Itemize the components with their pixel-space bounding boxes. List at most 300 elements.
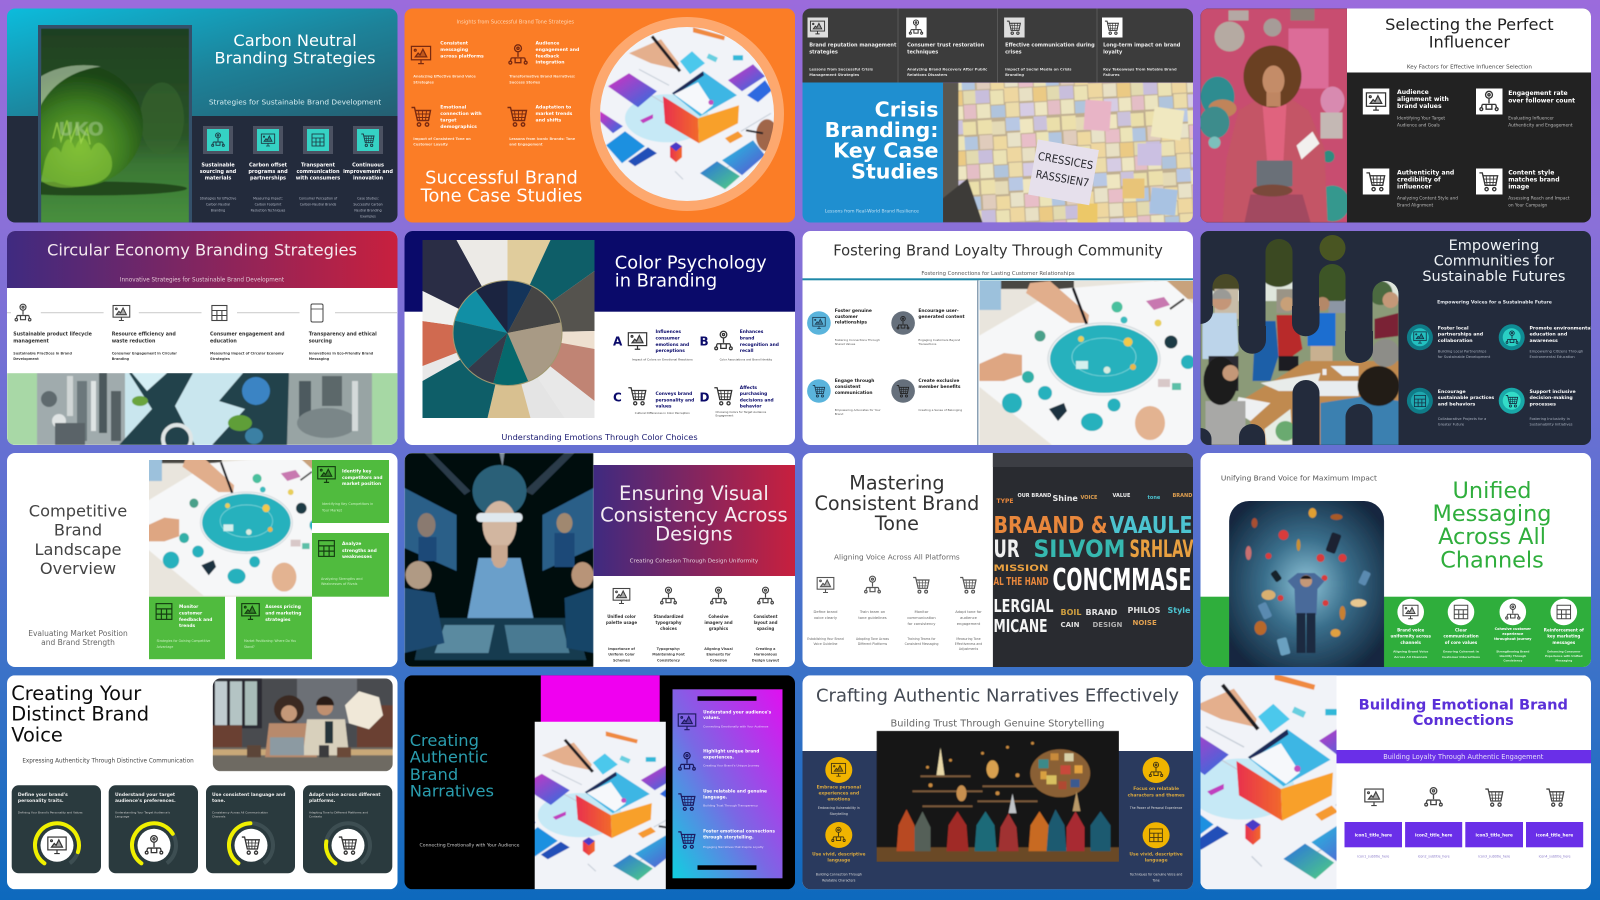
item: environmental education: Environmental Education <box>1530 355 1575 359</box>
step: storytelling: Foster emotional connections <box>703 829 775 835</box>
column: carbon offset: Carbon offset <box>249 162 288 168</box>
title <box>1359 696 1568 729</box>
card: audience preferences: Understanding Your Target Audience's <box>115 810 170 814</box>
image: futuristic visor scene <box>404 453 594 667</box>
image: community meeting seen through rounded columns <box>1200 230 1400 445</box>
item: user content: generated content <box>918 314 965 320</box>
block: pricing and marketing: strategies <box>265 617 291 623</box>
column: imagery: Cohesive <box>708 614 729 619</box>
card: personality traits <box>12 785 101 876</box>
channel: brand voice: Across All Channels <box>1394 655 1427 659</box>
column: trust: Consumer trust restoration <box>907 42 985 48</box>
step: genuine language: Building Trust Through Transparency <box>703 804 758 808</box>
subtitle: Key Factors for Effective Influencer Selection <box>1407 64 1532 70</box>
item: audience engagement <box>509 40 579 84</box>
block: analyze strengths <box>312 533 389 597</box>
column: icon 1 <box>1344 789 1402 858</box>
column: adopt tone: Measuring Tone <box>956 637 981 641</box>
item: user content: Encourage user- <box>918 308 959 314</box>
factor: content style: Content style <box>1508 170 1554 176</box>
subtitle: Building Trust Through Genuine Storytelling <box>891 719 1104 730</box>
column: icon 1: icon1_subtitle_here <box>1357 854 1389 858</box>
image: community planning map <box>974 279 1199 449</box>
panel: Selecting the Perfect Influencer: Influencer <box>1429 32 1510 52</box>
title <box>410 731 494 801</box>
item: audience engagement: Audience <box>536 40 559 46</box>
channel: core values: Ensuring Coherent in <box>1443 650 1479 654</box>
item D: behavior <box>740 404 762 410</box>
step: audience values: values. <box>703 715 721 721</box>
column: layout: spacing <box>757 626 774 631</box>
column: colour palette <box>606 588 637 663</box>
channel: customer experience <box>1494 599 1532 662</box>
step: storytelling: through storytelling. <box>703 835 754 841</box>
image: colour wheel <box>422 240 594 418</box>
title: Creating <box>410 731 479 750</box>
column: define voice: Establishing Your Brand <box>807 637 844 641</box>
item B: recognition and <box>740 342 779 348</box>
footer subtitle: Understanding Emotions Through Color Choices <box>501 432 698 442</box>
column: reputation: Management Strategies <box>809 73 860 77</box>
factor: audience alignment: brand values <box>1397 103 1442 110</box>
card: personality traits: Defining Your Brand's Personality and Values <box>18 810 83 814</box>
factor: engagement rate: over follower count <box>1508 98 1575 104</box>
column: continuous improvement: Continuous <box>352 162 384 168</box>
column: define voice: Voice Guideline <box>814 642 838 646</box>
item: personal experiences: Storytelling <box>830 812 848 816</box>
image: typography wall: PHILOS <box>1128 606 1161 615</box>
column: transparent communication: Carbon-Neutral Brands <box>300 202 337 206</box>
item: local partnerships <box>1407 324 1491 359</box>
title block: Crisis <box>875 98 938 122</box>
item D: Engagement <box>716 414 734 418</box>
step: storytelling: Engaging Narratives that Inspire Loyalty <box>703 845 764 849</box>
column: sustainable sourcing: Sustainable <box>201 162 235 168</box>
card: adapt voice: Contexts <box>309 814 322 818</box>
item: environmental education: awareness <box>1530 338 1558 344</box>
column: communication: Effective communication during <box>1005 42 1095 48</box>
column: train team: tone guidelines <box>858 616 887 620</box>
title: Brand <box>410 765 458 784</box>
column: communication <box>1004 18 1095 77</box>
block: identify competitors: market position <box>342 481 381 487</box>
column: transparent communication: communication <box>296 169 340 175</box>
column: reputation: Lessons from Successful Crisis <box>809 68 874 72</box>
block: analyze strengths: strengths and <box>342 548 377 554</box>
item: vivid language right: Use vivid, descriptive <box>1129 851 1183 857</box>
column: carbon offset: Carbon Footprint <box>255 202 282 206</box>
item: local partnerships: collaboration <box>1438 338 1473 344</box>
factor: content style: on Your Campaign <box>1508 202 1548 208</box>
column: adopt tone: Adjustments <box>959 647 979 651</box>
panel: Circular Economy Branding Strategies <box>7 231 398 453</box>
item A <box>613 329 693 362</box>
column: monitor: Consistent Messaging <box>905 642 938 646</box>
step: transparency <box>309 304 377 361</box>
item D: decisions and <box>740 398 774 404</box>
item: consistent communication: consistent <box>835 384 860 390</box>
title: Competitive <box>29 502 127 521</box>
title: Empowering <box>1449 238 1539 254</box>
title: Creating Your <box>11 682 141 705</box>
image: green glass sphere <box>38 25 192 222</box>
column: typography: Standardized <box>653 614 684 619</box>
item: consistent communication: communication <box>835 390 873 396</box>
factor: engagement rate: Evaluating Influencer <box>1508 116 1554 122</box>
block: identify competitors <box>312 460 389 523</box>
item: adaptation to trends: Adaptation to <box>536 104 571 110</box>
channel: key messages: messages <box>1552 640 1576 645</box>
image: typography wall: BRAND <box>1172 493 1192 499</box>
channel: core values: communication <box>1443 634 1479 639</box>
column: imagery: graphics <box>709 626 729 631</box>
step: brand experiences: Highlight unique brand <box>703 749 759 755</box>
item: environmental education: Promote environmental <box>1530 326 1592 332</box>
item: vivid language left: Building Connection Through <box>816 873 862 877</box>
step: consumer engagement: Strategies <box>210 357 230 361</box>
item: vivid language right <box>1129 822 1183 883</box>
factor: content style: matches brand <box>1508 176 1560 184</box>
item: adaptation to trends: and shifts <box>536 118 562 124</box>
title: Across All <box>1438 524 1546 550</box>
card: consistent language: tone. <box>212 798 225 804</box>
step: product lifecycle: Development <box>13 357 39 361</box>
channel: core values <box>1442 599 1480 659</box>
block: monitor feedback: Advantage <box>157 645 173 649</box>
item: user content: Engaging Customers Beyond <box>918 338 960 342</box>
image: typography wall: BRAND <box>1086 608 1118 617</box>
channel: key messages: Experience with Unified <box>1545 654 1583 658</box>
column: carbon offset: programs and <box>248 169 288 175</box>
column: define voice <box>807 578 844 646</box>
channel: brand voice: Brand voice <box>1397 628 1425 633</box>
item: user content: Transactions <box>917 342 937 346</box>
block: analyze strengths: weaknesses <box>342 554 372 560</box>
column: sustainable sourcing: sourcing and <box>200 169 237 175</box>
image: typography wall: MICANE <box>994 616 1048 637</box>
title block <box>802 82 943 222</box>
step: transparency: sourcing <box>309 339 333 345</box>
image: planning map <box>140 455 324 599</box>
column: icon 4: icon4_subtitle_here <box>1539 854 1571 858</box>
title: Messaging <box>1433 501 1551 527</box>
column: sustainable sourcing: materials <box>205 176 231 182</box>
item: audience engagement: Success Stories <box>509 80 540 84</box>
item C: Cultural Differences in Color Perception <box>635 411 690 415</box>
item: adaptation to trends <box>508 104 576 146</box>
column: colour palette: Schemes <box>613 659 630 663</box>
item: personal experiences: emotions <box>827 796 851 802</box>
image: sticky-note wall: CRESSICES <box>1037 150 1094 172</box>
subtitle <box>28 629 128 647</box>
panel: Competitive Brand Landscape Overview <box>7 453 398 667</box>
block: monitor feedback: feedback and <box>179 617 212 623</box>
title <box>11 682 149 747</box>
panel: Empowering Communities <box>1200 230 1592 445</box>
title: Overview <box>40 559 116 578</box>
item B: Color Associations and Brand Identity <box>720 358 773 362</box>
title: Circular Economy Branding Strategies <box>47 241 357 260</box>
step: transparency: Messaging <box>309 357 330 361</box>
item: member benefits: member benefits <box>918 384 961 390</box>
column: long-term impact: loyalty <box>1103 50 1123 56</box>
block: analyze strengths: Analyze <box>342 541 361 547</box>
item C: Conveys brand <box>656 391 692 397</box>
block: identify competitors: Identify key <box>342 468 372 474</box>
subtitle band: Building Loyalty Through Authentic Engagement <box>1383 753 1544 761</box>
title band <box>594 465 796 576</box>
image: isometric box <box>454 695 774 900</box>
factor: engagement rate <box>1476 88 1575 128</box>
item: emotional connection: Impact of Consistent Tone on <box>413 137 471 141</box>
item: environmental education: Empowering Citizens Through <box>1530 350 1583 354</box>
image: influencer portrait <box>1200 8 1350 222</box>
column: trust: Analyzing Brand Recovery After Public <box>907 68 987 72</box>
item: environmental education <box>1499 324 1592 359</box>
title: Landscape <box>35 540 122 559</box>
item: personal experiences: Embrace personal <box>817 784 862 790</box>
channel: core values: of core values <box>1445 640 1478 645</box>
channel: customer experience: Strengthening Brand <box>1496 650 1529 654</box>
block: analyze strengths: Analyzing Strengths and <box>321 577 362 581</box>
title: Building Emotional Brand <box>1359 696 1568 713</box>
item: sustainable practices <box>1407 388 1494 426</box>
column: imagery: Cohesion <box>710 659 728 663</box>
item: emotional connection: Emotional <box>440 104 467 110</box>
image: green glass sphere: UKO <box>58 118 104 140</box>
factor: audience alignment: Audience and Goals <box>1397 122 1441 128</box>
panel: Building Emotional Brand Connections <box>1082 623 1592 900</box>
step: resource efficiency: waste reduction <box>112 339 156 345</box>
channel: customer experience: Cohesive customer <box>1495 627 1531 631</box>
card: adapt voice <box>303 785 392 876</box>
block: identify competitors: Identifying Key Competitors in <box>322 502 373 506</box>
item: genuine relationships <box>807 308 880 346</box>
column: sustainable sourcing: Carbon Neutral <box>206 202 230 206</box>
item: local partnerships: partnerships and <box>1438 332 1483 338</box>
item: user content <box>891 308 965 346</box>
factor: content style <box>1476 168 1570 208</box>
item C: personality and <box>656 398 694 404</box>
column: icon 2 <box>1405 788 1462 858</box>
step: product lifecycle: Sustainable Practices in Brand <box>13 352 72 356</box>
item B: brand <box>740 336 754 342</box>
item: sustainable practices: Collaborative Projects for a <box>1438 417 1486 421</box>
column: define voice: Define brand <box>813 610 838 614</box>
item: consistent communication: Empowering Advocates for Your <box>835 408 881 412</box>
block: pricing and marketing: Stand? <box>244 645 255 649</box>
panel: Crisis Branding <box>802 8 1194 224</box>
panel: Selecting the Perfect Influencer <box>1200 8 1592 222</box>
factor: authenticity: Authenticity and <box>1397 170 1454 176</box>
item: adaptation to trends: market trends <box>536 111 573 117</box>
title: Distinct Brand <box>11 703 149 726</box>
item: consistent messaging: Analyzing Effective Brand Voice <box>413 74 476 78</box>
block: pricing and marketing: Assess pricing <box>265 604 301 610</box>
step: resource efficiency: Branding <box>112 357 130 361</box>
panel: Crafting Authentic Narratives Effectively <box>802 675 1194 890</box>
item: local partnerships: for Sustainable Development <box>1438 355 1491 359</box>
item B: B <box>700 335 709 349</box>
column: long-term impact: Long-term impact on brand <box>1103 42 1181 48</box>
title: Fostering Brand Loyalty Through Community <box>833 243 1163 260</box>
panel: Creating Your Distinct Brand Voice <box>7 675 398 889</box>
title: Unified <box>1453 478 1531 504</box>
steps column <box>672 689 782 878</box>
column: imagery <box>704 587 733 663</box>
column: monitor: for consistency <box>908 622 936 626</box>
column: icon 3: icon3_subtitle_here <box>1478 854 1510 858</box>
item A: Influences <box>656 329 681 335</box>
factor: content style: image <box>1508 184 1529 190</box>
item B: Enhances <box>740 329 764 335</box>
channel: customer experience: Identity Through <box>1500 654 1526 658</box>
image: typography wall: AL THE HAND <box>994 575 1048 588</box>
item: consistent communication <box>807 378 881 416</box>
column: typography: choices <box>660 626 678 631</box>
column: icon 1: icon1_title_here <box>1355 832 1392 837</box>
column: reputation: Brand reputation management <box>809 42 897 48</box>
column: long-term impact: Key Takeaways from Notable Brand <box>1103 68 1177 72</box>
column: layout: layout and <box>754 620 778 625</box>
image: typography wall: DESIGN <box>1092 621 1122 629</box>
image: recycling machinery <box>7 373 398 445</box>
channel: customer experience: experience <box>1502 632 1524 636</box>
image: overwhelmed person in message storm <box>1228 500 1384 668</box>
item: emotional connection: Customer Loyalty <box>413 142 449 146</box>
item: inclusive decisions: Fostering Inclusivity in <box>1530 417 1570 421</box>
column: layout: Design Layout <box>752 659 779 663</box>
subtitle: and Brand Strength <box>41 638 115 647</box>
column: colour palette: palette usage <box>606 620 637 625</box>
subtitle: Insights from Successful Brand Tone Strategies <box>457 20 574 26</box>
item: consistent messaging: messaging <box>440 47 468 53</box>
step: genuine language <box>678 789 767 810</box>
image: typography wall: CAIN <box>1060 621 1080 629</box>
image: circular illustration <box>590 17 784 211</box>
block: identify competitors: competitors and <box>342 475 383 481</box>
column: transparent communication: Consumer Perception of <box>299 196 338 200</box>
factor: engagement rate: Authenticity and Engagement <box>1508 122 1573 128</box>
item: personal experiences: experiences and <box>818 790 859 796</box>
factor: engagement rate: Engagement rate <box>1508 90 1568 97</box>
image: typography wall: Style <box>1168 606 1191 615</box>
channel: core values: Customer Interactions <box>1442 655 1480 659</box>
title: Selecting the Perfect <box>1385 15 1554 34</box>
column: continuous improvement: Examples <box>360 214 376 218</box>
title band: Consistency Across <box>600 504 788 527</box>
card: audience preferences: Understand your target <box>115 792 176 798</box>
image: typography wall: BOIL <box>1060 608 1081 617</box>
step: transparency: Innovations in Eco-Friendly Brand <box>309 352 374 356</box>
subtitle: Connecting Emotionally with Your Audience <box>420 843 520 849</box>
subtitle: Expressing Authenticity Through Distinctive Communication <box>22 758 194 764</box>
item: environmental education: education and <box>1530 332 1567 338</box>
step: genuine language: Use relatable and genuine <box>703 789 767 795</box>
item: adaptation to trends: and Engagement <box>509 142 543 146</box>
item: consistent communication: Brand <box>835 412 843 416</box>
image: typography wall: OUR BRAND <box>1018 493 1051 499</box>
card: audience preferences: Language <box>115 814 129 818</box>
item: member benefits: Create exclusive <box>918 378 959 384</box>
title: Mastering <box>849 471 945 494</box>
item D <box>700 385 774 418</box>
block: monitor feedback: Strategies for Gaining Competitive <box>157 639 210 643</box>
block: monitor feedback: customer <box>179 610 203 616</box>
column: sustainable sourcing: Strategies for Effective <box>200 196 236 200</box>
image: typography wall: NOISE <box>1132 619 1157 627</box>
item: sustainable practices: sustainable practices <box>1438 395 1494 401</box>
channel: key messages: Reinforcement of <box>1544 628 1584 633</box>
title: Successful Brand <box>425 168 578 188</box>
factor: authenticity: Brand Alignment <box>1397 202 1433 208</box>
title block: Studies <box>851 160 938 184</box>
column: trust: Relations Disasters <box>907 73 948 77</box>
factor: audience alignment <box>1363 88 1449 128</box>
column: layout <box>752 587 779 663</box>
title: Channels <box>1440 547 1544 573</box>
title: Tone <box>874 512 919 535</box>
factor: content style: Assessing Reach and Impact <box>1508 196 1570 202</box>
item: consistent messaging <box>411 40 484 84</box>
item C: values <box>656 404 672 410</box>
column: typography <box>652 587 685 663</box>
channel: brand voice: channels <box>1400 640 1422 645</box>
item: vivid language left: language <box>827 857 850 863</box>
step: resource efficiency <box>112 306 177 361</box>
column: icon 2: icon2_title_here <box>1415 832 1453 837</box>
item: relatable characters <box>1128 757 1185 810</box>
item: vivid language left: Relatable Characters <box>822 879 856 883</box>
panel: Creating Authentic Brand Narratives <box>404 675 796 900</box>
step: brand experiences: Creating Your Brand's Unique Journey <box>703 764 760 768</box>
column: colour palette: Uniform Color <box>608 653 635 657</box>
step: brand experiences: experiences. <box>703 755 734 761</box>
column: continuous improvement <box>343 126 393 218</box>
panel: Successful Brand Tone Case Studies <box>404 8 795 222</box>
channel: customer experience: Consistency <box>1503 658 1522 662</box>
channel: brand voice: uniformity across <box>1390 634 1431 639</box>
image: typography wall: VALUE <box>1112 493 1131 499</box>
item: personal experiences: Embracing Vulnerability in <box>818 806 860 810</box>
column: icon 4 <box>1526 789 1583 858</box>
column: communication: Branding <box>1005 73 1024 77</box>
item: vivid language right: Tone <box>1152 879 1160 883</box>
column: continuous improvement: innovation <box>353 176 383 182</box>
step: genuine language: language. <box>703 795 728 801</box>
column: carbon offset: partnerships <box>250 176 286 182</box>
item: sustainable practices: Greater Future <box>1438 422 1465 426</box>
item: vivid language right: Techniques for Genuine Voice and <box>1129 873 1182 877</box>
image: typography wall: tone <box>1148 495 1161 501</box>
item: inclusive decisions <box>1499 388 1576 426</box>
column: communication: crises <box>1005 50 1022 56</box>
item: relatable characters: characters and themes <box>1128 792 1185 798</box>
column: adopt tone: engagement <box>957 622 981 626</box>
column: layout: Consistent <box>753 614 778 619</box>
step: product lifecycle <box>13 304 93 361</box>
column: monitor: communication <box>907 616 936 620</box>
step: audience values <box>678 709 772 730</box>
step: resource efficiency: Consumer Engagement in Circular <box>112 352 177 356</box>
block: pricing and marketing <box>236 597 312 659</box>
step: consumer engagement: education <box>210 339 237 345</box>
column: continuous improvement: Successful Carbon <box>353 202 383 206</box>
item: consistent communication: Engage through <box>835 378 874 384</box>
item A: A <box>613 335 623 349</box>
column: adopt tone <box>955 578 982 651</box>
step: product lifecycle: management <box>13 339 50 345</box>
